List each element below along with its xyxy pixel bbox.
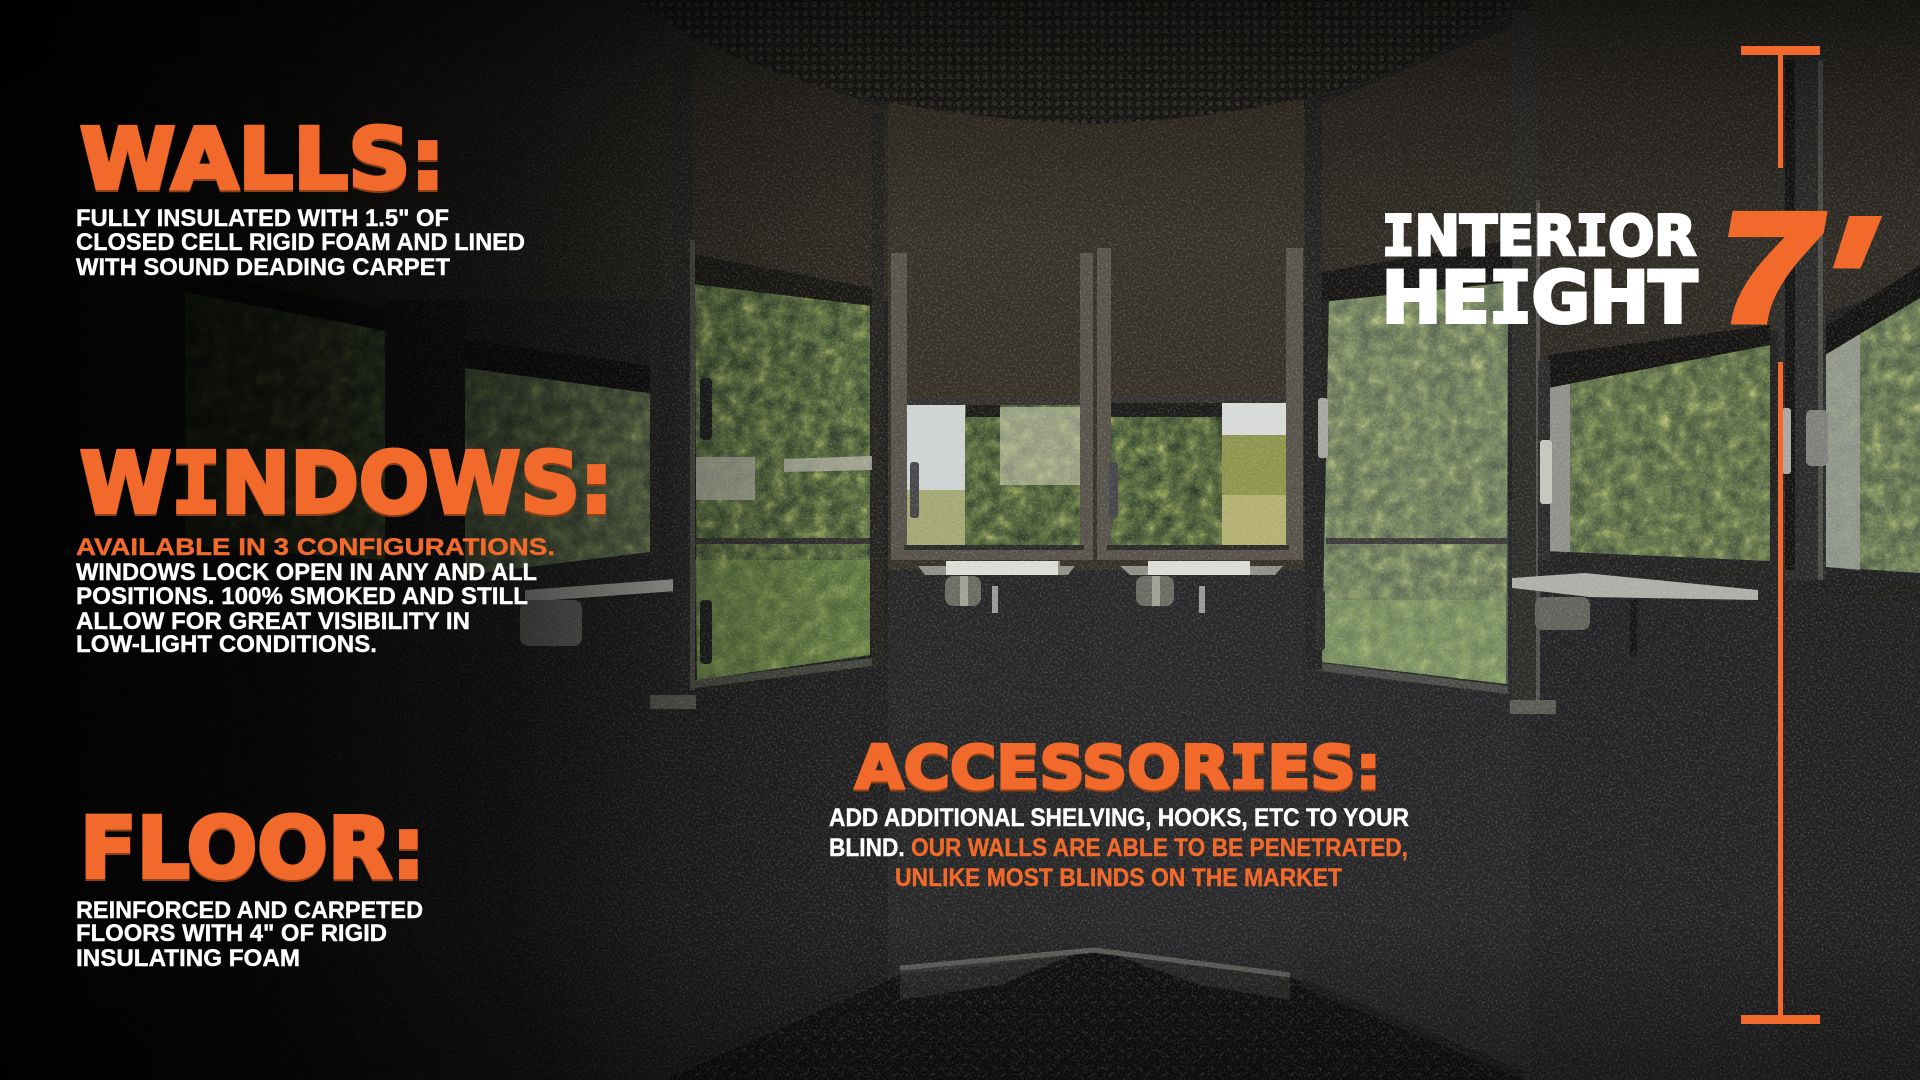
text block: accessories description: UNLIKE MOST BLINDS ON THE MARKET bbox=[895, 864, 1342, 892]
vertical door column bbox=[1778, 50, 1828, 580]
text block: floor description: INSULATING FOAM bbox=[76, 945, 300, 972]
text block: walls description: FULLY INSULATED WITH 1.5" OF bbox=[76, 205, 449, 232]
text block: windows description bbox=[76, 534, 555, 658]
window A bbox=[650, 50, 884, 709]
label: interior height: INTERIOR bbox=[1382, 204, 1696, 268]
window D bbox=[1800, 265, 1920, 605]
text block: accessories description: ADD ADDITIONAL SHELVING, HOOKS, ETC TO YOUR bbox=[829, 804, 1409, 832]
panel: windows bbox=[76, 434, 613, 658]
panel: walls bbox=[76, 110, 525, 281]
ceiling bbox=[637, 0, 1518, 124]
text block: accessories description: BLIND. OUR WALLS ARE ABLE TO BE PENETRATED, bbox=[829, 834, 1408, 862]
number: seven feet bbox=[1705, 183, 1897, 375]
upper carpeted walls bbox=[200, 0, 1920, 570]
center window right bbox=[1097, 248, 1303, 560]
panel: interior height bbox=[1382, 46, 1897, 1024]
floor bbox=[664, 950, 1525, 1080]
text block: walls description bbox=[76, 205, 525, 281]
window B bbox=[1305, 10, 1556, 714]
height measurement bracket bbox=[1741, 46, 1820, 1024]
far left windows bbox=[185, 200, 690, 646]
heading: walls: WALLS: bbox=[80, 110, 445, 208]
shelf and cup holder right bbox=[1512, 573, 1758, 656]
text block: floor description: REINFORCED AND CARPETED bbox=[76, 897, 423, 924]
text block: walls description: WITH SOUND DEADING CARPET bbox=[76, 254, 450, 281]
text block: windows description: AVAILABLE IN 3 CONFIGURATIONS. bbox=[76, 534, 555, 561]
panel: floor bbox=[76, 799, 425, 972]
panel: accessories bbox=[829, 733, 1409, 892]
shelves and cup holders bbox=[918, 561, 1283, 613]
text block: windows description: LOW-LIGHT CONDITIONS. bbox=[76, 631, 377, 658]
text block: windows description: WINDOWS LOCK OPEN IN ANY AND ALL bbox=[76, 559, 537, 586]
number: seven feet: ' bbox=[1788, 185, 1897, 375]
number: seven feet: 7 bbox=[1705, 183, 1835, 353]
heading: floor: FLOOR: bbox=[80, 799, 425, 897]
text block: accessories description bbox=[829, 804, 1409, 892]
label: interior height bbox=[1382, 204, 1697, 339]
text block: windows description: POSITIONS. 100% SMOKED AND STILL bbox=[76, 583, 528, 610]
text block: floor description: FLOORS WITH 4" OF RIGID bbox=[76, 920, 387, 947]
text block: walls description: CLOSED CELL RIGID FOAM AND LINED bbox=[76, 229, 525, 256]
text block: floor description bbox=[76, 897, 423, 972]
window C bbox=[1538, 325, 1775, 592]
text block: windows description: ALLOW FOR GREAT VISIBILITY IN bbox=[76, 608, 470, 635]
heading: windows: WINDOWS: bbox=[80, 434, 613, 532]
center window left bbox=[891, 253, 1093, 560]
label: interior height: HEIGHT bbox=[1382, 257, 1697, 339]
heading: accessories: ACCESSOR IES: bbox=[855, 733, 1381, 803]
